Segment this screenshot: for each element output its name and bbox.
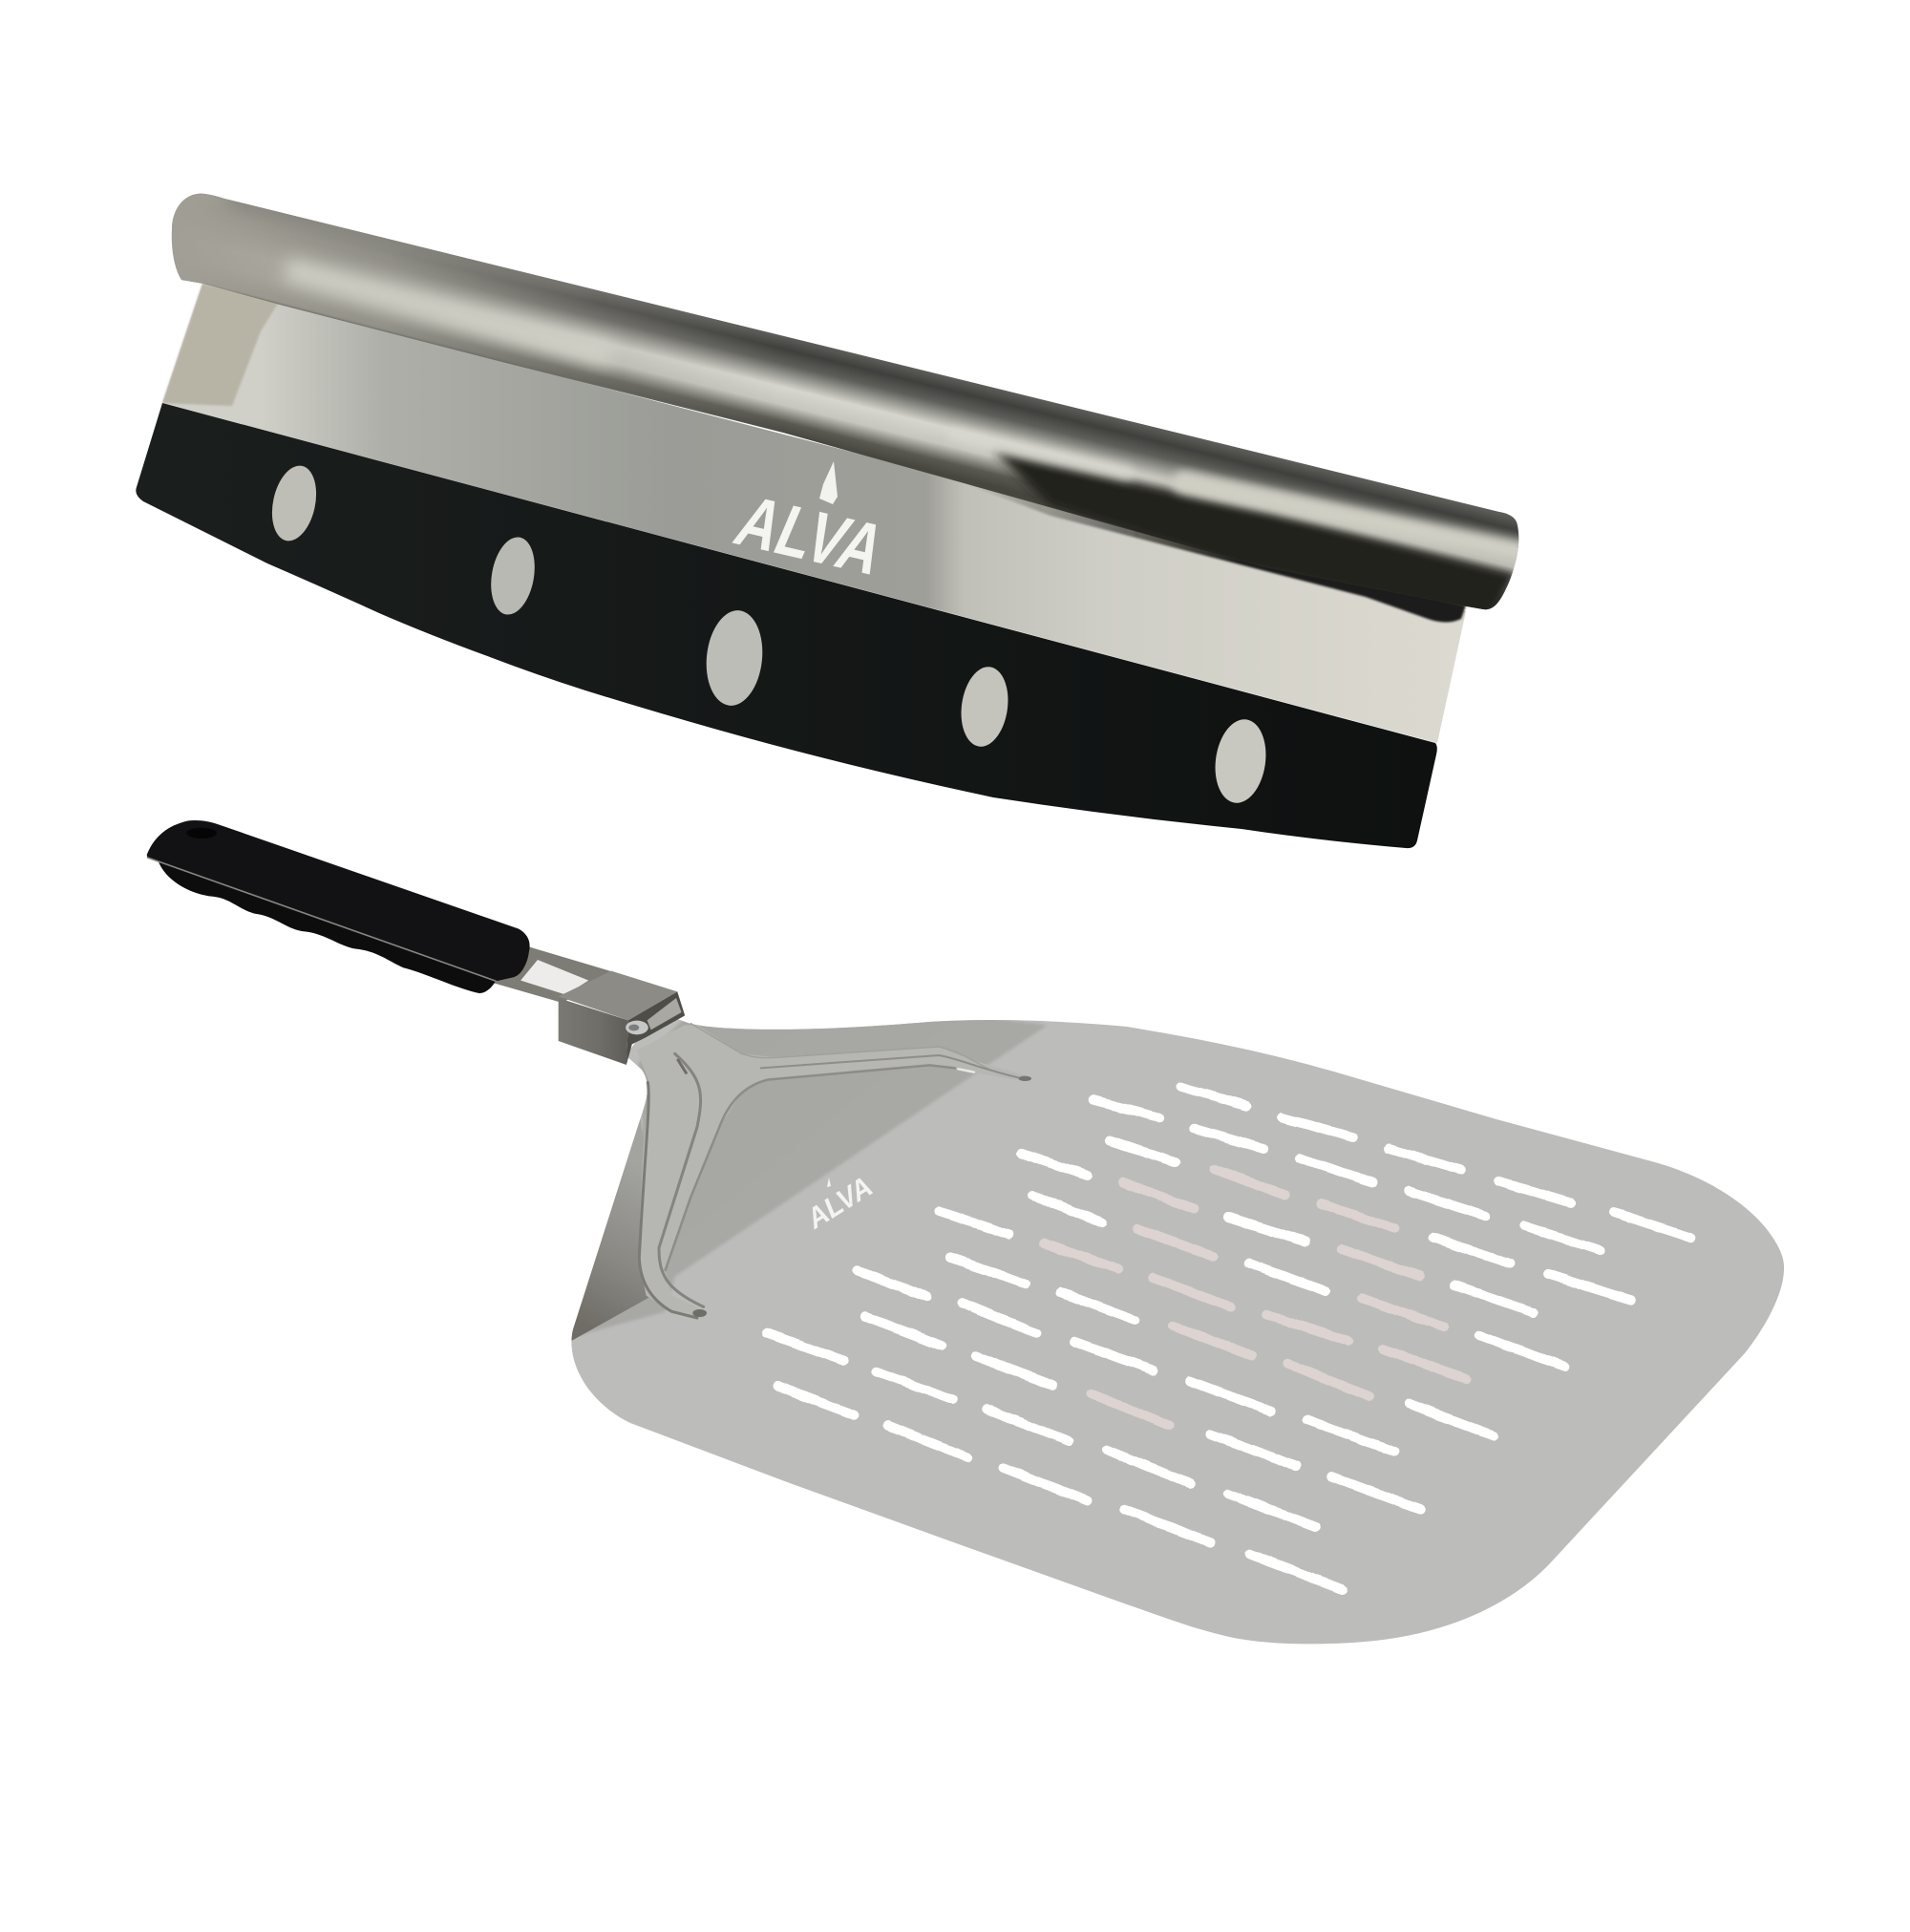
peel metal rod and folding hinge	[491, 945, 685, 1065]
peel perforation slots	[767, 1087, 1690, 1589]
ALVA logo on cutter blade: ALVA	[724, 482, 897, 590]
perforated pizza peel	[147, 820, 1784, 1644]
pizza cutter rocker knife	[136, 181, 1528, 848]
peel blade body	[571, 1012, 1784, 1644]
ALVA logo on peel: ALVA	[804, 1169, 877, 1237]
peel forked bracket	[637, 1024, 1032, 1318]
peel neck shading	[565, 1012, 1048, 1342]
peel black ribbed handle	[147, 820, 530, 993]
cutter black blade guard with oval cut-outs	[136, 403, 1437, 848]
cutter steel blade	[162, 284, 1466, 743]
ALVA logo on cutter blade	[724, 461, 897, 590]
cutter tubular steel handle	[162, 181, 1528, 621]
